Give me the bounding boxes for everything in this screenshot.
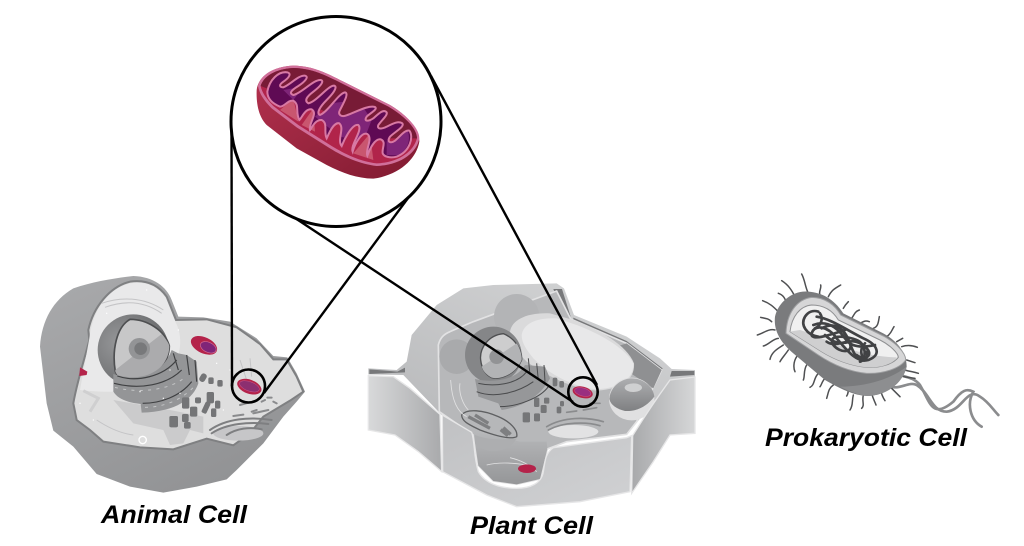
chloroplast spheres bbox=[439, 294, 539, 374]
outer lower sheen bbox=[840, 367, 907, 396]
back wall bbox=[261, 68, 417, 138]
matrix lighter patches bbox=[283, 87, 409, 155]
dark wall edges bbox=[369, 289, 694, 377]
golgi apparatus bbox=[547, 403, 603, 438]
right wall bbox=[632, 377, 695, 493]
upper lobe sphere tint bbox=[80, 283, 180, 392]
endoplasmic reticulum bbox=[475, 358, 550, 410]
label: prokaryotic cell: Prokaryotic Cell bbox=[765, 424, 968, 452]
line to plant cell left bbox=[292, 216, 573, 402]
lower pink wedges bbox=[280, 98, 373, 160]
strands bbox=[451, 380, 537, 472]
animal cell cytoplasm bbox=[73, 281, 303, 449]
nucleus bbox=[98, 314, 169, 386]
cytoplasm lower shade bbox=[790, 330, 897, 367]
microtubule cylinders bbox=[169, 372, 223, 429]
label: plant cell: Plant Cell bbox=[470, 512, 594, 540]
vesicles bbox=[83, 391, 146, 444]
animal cell bbox=[40, 276, 305, 493]
matrix bbox=[267, 72, 411, 157]
line to animal cell right bbox=[264, 194, 411, 393]
nucleus bbox=[465, 327, 522, 383]
mitochondrion highlighted bbox=[571, 384, 594, 400]
mitochondrion small highlighted bbox=[235, 376, 264, 398]
floor of the cell bbox=[473, 432, 547, 484]
back wall bbox=[368, 283, 695, 435]
speckles bbox=[80, 290, 230, 420]
zoom callout lines and circles bbox=[232, 76, 598, 407]
inner base lower bbox=[261, 68, 417, 163]
outer side bbox=[257, 66, 419, 179]
dna tangle bbox=[803, 311, 877, 362]
cell body outer bbox=[775, 292, 907, 396]
mitochondrion enlarged bbox=[257, 66, 419, 179]
mitochondrion edge bbox=[79, 367, 87, 376]
label: animal cell: Animal Cell bbox=[100, 501, 248, 529]
plant cell bbox=[368, 283, 695, 507]
chloroplast stacked bbox=[462, 411, 517, 451]
cristae outline bbox=[267, 72, 411, 157]
golgi apparatus bbox=[210, 398, 277, 441]
vacuole bbox=[510, 313, 634, 391]
magnifier circle bbox=[231, 16, 441, 226]
left wall bbox=[368, 376, 442, 472]
microtubule cylinders bbox=[523, 378, 564, 422]
front wall bbox=[442, 415, 632, 507]
prokaryotic cell bbox=[757, 274, 998, 427]
line to animal cell left bbox=[230, 125, 233, 386]
plant cytoplasm bbox=[438, 291, 662, 484]
pili bbox=[757, 274, 918, 410]
plant cell magnifier ring bbox=[568, 377, 598, 407]
flagella bbox=[883, 373, 998, 427]
line to plant cell right bbox=[431, 76, 597, 385]
cytoplasm bbox=[790, 305, 898, 367]
chloroplast right bbox=[609, 378, 654, 420]
mitochondrion large bbox=[188, 332, 220, 358]
top rim bbox=[258, 66, 419, 166]
endoplasmic strokes bbox=[97, 299, 252, 435]
right dark cytoplasm bbox=[600, 343, 662, 388]
animal cell magnifier ring bbox=[232, 370, 265, 402]
lower cytoplasm shade bbox=[113, 400, 203, 445]
inner membrane ring bbox=[786, 297, 906, 373]
mitochondrion lower bbox=[518, 464, 536, 473]
animal cell outer body bbox=[40, 276, 305, 493]
rough endoplasmic reticulum bbox=[113, 350, 198, 413]
